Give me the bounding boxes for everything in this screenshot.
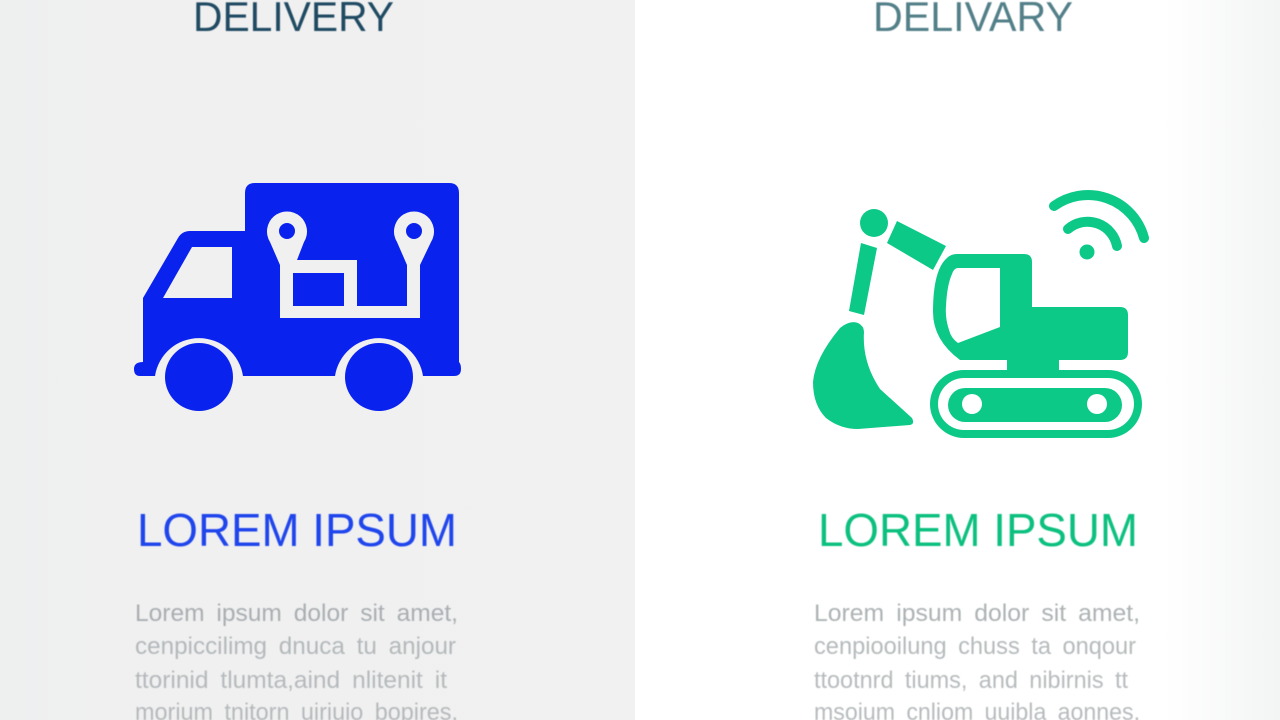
arm joint	[860, 209, 888, 237]
body text: right column	[814, 600, 1140, 720]
body text: right column: cenpiooilung chuss ta onqour	[814, 633, 1136, 660]
icon: delivery truck with route pins	[134, 183, 461, 411]
bucket	[813, 322, 913, 429]
body text: right column: Lorem ipsum dolor sit amet,	[814, 600, 1140, 627]
title: lorem ipsum blue: LOREM IPSUM	[137, 504, 457, 556]
crawler track	[930, 370, 1142, 438]
panel: delivery truck	[0, 0, 635, 720]
body text: left column: Lorem ipsum dolor sit amet,	[135, 600, 458, 627]
panel: excavator	[635, 0, 1280, 720]
wheel: rear	[345, 343, 413, 411]
title: lorem ipsum green: LOREM IPSUM	[818, 504, 1138, 556]
body text: right column: ttootnrd tiums, and nibirnis tt	[814, 667, 1128, 694]
cab window	[163, 247, 232, 298]
icon: connected excavator	[813, 195, 1144, 438]
icon: wifi signal	[1054, 195, 1144, 260]
stick	[849, 243, 877, 315]
cab and body	[933, 254, 1128, 370]
wheel: front	[165, 343, 233, 411]
crawler inner belt	[948, 388, 1122, 422]
body text: left column: cenpiccilimg dnuca tu anjour	[135, 633, 456, 660]
icon: route pins and parcel line	[267, 211, 434, 318]
body text: left column: ttorinid tlumta,aind nlitenit it	[135, 667, 447, 694]
body text: left column	[135, 600, 458, 720]
boom	[887, 221, 946, 270]
